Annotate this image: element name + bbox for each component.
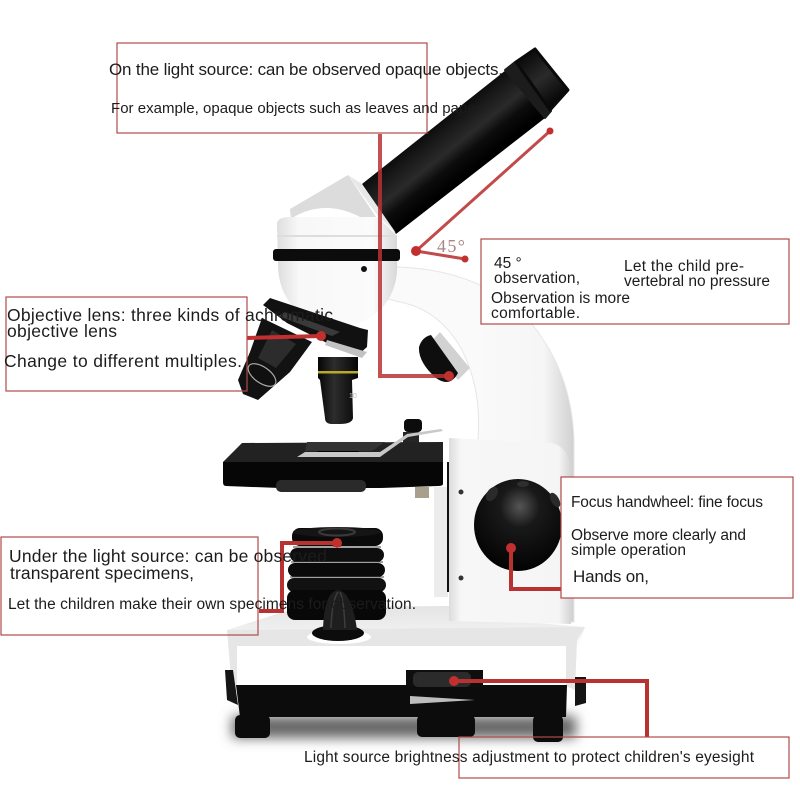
- stage: [223, 429, 443, 498]
- base shadow: [232, 716, 576, 738]
- arm: [384, 267, 574, 622]
- side knob on arm: [419, 332, 470, 382]
- callout: 45 degree: comfortable.: [491, 305, 580, 322]
- stage support: [434, 487, 448, 597]
- leader lines: [247, 131, 647, 737]
- filter wheel knob: [307, 590, 371, 644]
- callout: 45 degree: observation,: [494, 270, 580, 287]
- callout: under light source: [1, 537, 416, 635]
- leader dots: [316, 128, 554, 686]
- leader: objective lens: [247, 336, 321, 338]
- callout: under light source: Let the children make their own specimens for observation.: [8, 596, 416, 613]
- callout: light source: For example, opaque objects such as leaves and paper.: [111, 100, 484, 117]
- base: [225, 606, 586, 742]
- objective centre: [318, 357, 358, 424]
- callout: brightness: [304, 737, 789, 778]
- leader: condenser: [259, 543, 337, 611]
- callout: objective lens: Change to different multiples.: [4, 351, 242, 371]
- angle label: 45°: [437, 236, 465, 256]
- microscope illustration: [223, 49, 586, 742]
- head black band: [273, 249, 400, 261]
- condenser: [287, 527, 386, 620]
- brightness wheel: [406, 670, 483, 704]
- eyepiece tube: [362, 49, 568, 234]
- callout: 45 degree: Observation is more: [491, 290, 630, 307]
- head body: [277, 217, 397, 262]
- callout: focus handwheel: Observe more clearly and: [571, 527, 746, 544]
- callout: 45 degree: 45 °: [494, 255, 522, 272]
- objective centre: 10: [349, 393, 357, 400]
- callout: objective lens: [4, 297, 333, 391]
- callout: 45 degree: vertebral no pressure: [624, 273, 770, 290]
- callout: under light source: transparent specimens,: [10, 563, 194, 583]
- head prism: [290, 175, 378, 220]
- callout: 45 degree: Let the child pre-: [624, 258, 744, 275]
- callout: light source: [109, 43, 503, 133]
- callout: light source: On the light source: can be observed opaque objects.: [109, 60, 503, 79]
- objective left: [238, 318, 312, 400]
- callout: 45 degree: [481, 239, 789, 324]
- leader: brightness: [454, 681, 647, 737]
- callout: focus handwheel: Hands on,: [573, 567, 649, 586]
- callout: under light source: Under the light source: can be observed: [9, 546, 327, 566]
- leader: focus handwheel: [511, 548, 561, 589]
- callout: objective lens: Objective lens: three kinds of achromatic: [7, 305, 333, 325]
- callout: focus handwheel: simple operation: [571, 542, 686, 559]
- callout: focus handwheel: Focus handwheel: fine focus: [571, 494, 763, 511]
- leader: 45 degree angle: [416, 131, 550, 259]
- leader: eyepiece observation to side knob: [380, 134, 449, 376]
- nosepiece: [263, 298, 368, 358]
- callout: focus handwheel: [561, 477, 793, 598]
- callout: objective lens: objective lens: [7, 321, 117, 341]
- focus knob: [474, 479, 562, 571]
- callout: brightness: Light source brightness adjustment to protect children's eyesight: [304, 749, 755, 766]
- pillar housing: [449, 438, 571, 624]
- stage clip: [403, 419, 422, 462]
